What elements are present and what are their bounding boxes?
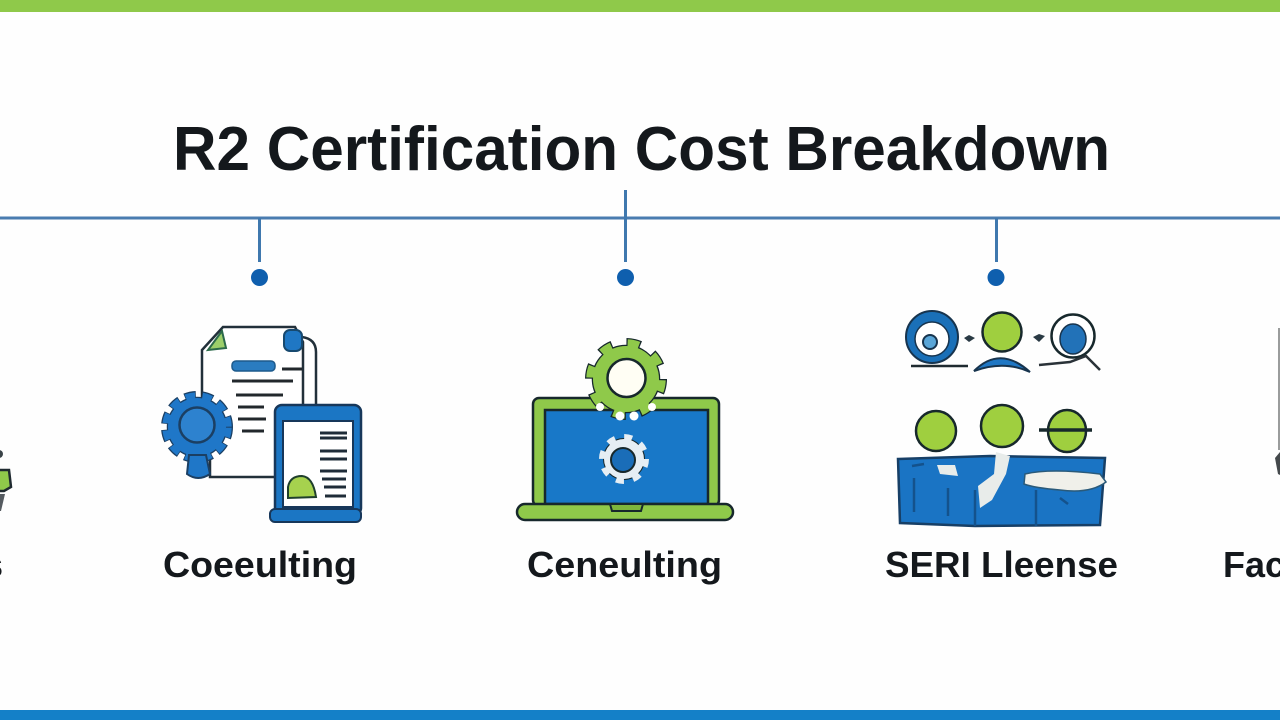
timeline connector xyxy=(0,190,1280,286)
corner tab blue xyxy=(284,330,302,351)
icon: people group xyxy=(898,311,1106,526)
body details xyxy=(937,452,1010,508)
label: SERI Lleense: SERI Lleense xyxy=(885,544,1118,585)
top row figures xyxy=(906,311,1100,372)
back document xyxy=(225,337,316,420)
icon: partial item at right edge xyxy=(1275,328,1280,475)
gear xyxy=(166,396,228,478)
bottom accent band xyxy=(0,710,1280,720)
green gear xyxy=(590,343,662,420)
icon: documents, gear and tablet xyxy=(166,327,361,522)
label: Ceneulting: Ceneulting xyxy=(527,544,722,585)
label: Coeeulting: Coeeulting xyxy=(163,544,357,585)
title: R2 Certification Cost Breakdown xyxy=(173,115,1110,184)
white gear on screen xyxy=(602,437,646,481)
laptop frame xyxy=(533,398,719,506)
lower row bodies xyxy=(898,456,1105,526)
hat brim xyxy=(1039,428,1092,432)
tablet xyxy=(270,405,361,522)
icon: laptop with gears xyxy=(517,343,733,520)
document text lines xyxy=(232,369,302,431)
icon: partial item at left edge xyxy=(0,450,11,511)
top accent band xyxy=(0,0,1280,12)
laptop screen xyxy=(545,410,708,504)
corner tab green xyxy=(208,331,226,350)
laptop base xyxy=(517,504,733,520)
document heading xyxy=(232,361,275,371)
front document xyxy=(202,327,303,477)
lower row heads xyxy=(916,411,956,451)
laptop notch xyxy=(610,504,643,511)
